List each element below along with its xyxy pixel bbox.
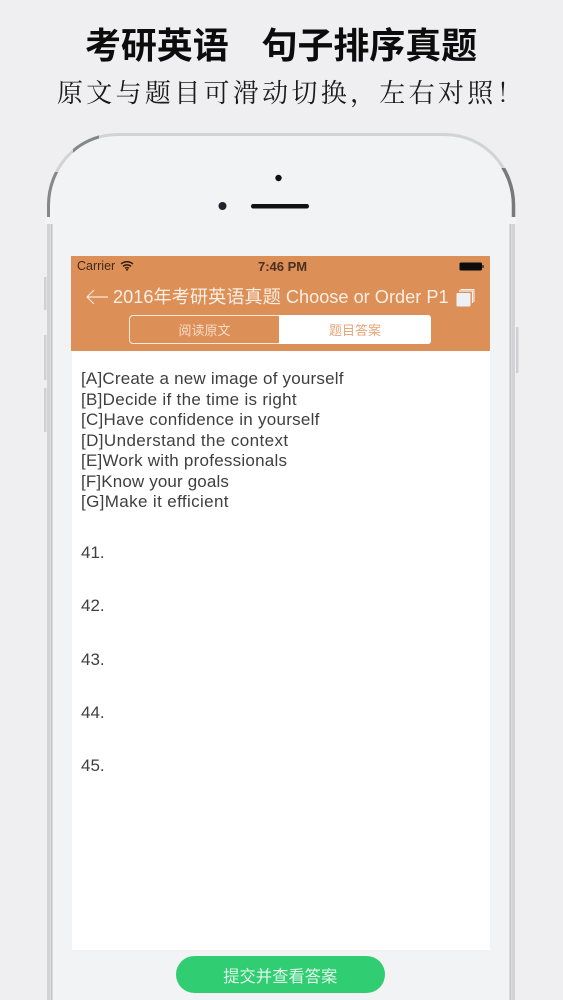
option list: [B]Decide if the time is right	[81, 390, 297, 408]
phone frame	[44, 133, 518, 1000]
answer numbers: 44.	[81, 703, 105, 722]
answer numbers: 41.	[81, 543, 105, 562]
carrier: Carrier	[77, 259, 115, 273]
title: 考研英语 句子排序真题	[85, 25, 477, 66]
speaker	[251, 204, 309, 208]
option list: [D]Understand the context	[81, 430, 289, 450]
option list	[81, 369, 344, 511]
submit button: 提交并查看答案	[223, 968, 337, 986]
option list: [G]Make it efficient	[81, 492, 229, 511]
answer numbers	[81, 543, 105, 775]
option list: [A]Create a new image of yourself	[81, 369, 344, 388]
option list: [F]Know your goals	[81, 472, 229, 490]
icon: wifi	[120, 261, 134, 271]
option list: [C]Have confidence in yourself	[81, 410, 320, 429]
subtitle: 原文与题目可滑动切换，左右对照！	[57, 79, 526, 108]
sensor dot	[275, 175, 282, 181]
segmented control	[129, 315, 431, 344]
icon: copy	[456, 289, 474, 306]
side buttons	[44, 277, 518, 432]
icon: back arrow	[86, 290, 108, 304]
answer numbers: 42.	[81, 596, 105, 615]
nav title: 2016年考研英语真题 Choose or Order P1	[113, 287, 449, 307]
tab: answers: 题目答案	[329, 323, 381, 338]
camera	[218, 202, 226, 210]
content panel	[72, 351, 490, 950]
time: 7:46 PM	[258, 259, 307, 274]
tab: answers	[279, 315, 431, 344]
phone body	[45, 133, 516, 1000]
icon: battery	[460, 262, 484, 270]
answer numbers: 43.	[81, 650, 105, 669]
option list: [E]Work with professionals	[81, 451, 287, 470]
submit button	[176, 956, 385, 993]
app header	[71, 256, 490, 351]
tab: reading: 阅读原文	[178, 323, 230, 338]
answer numbers: 45.	[81, 756, 105, 775]
